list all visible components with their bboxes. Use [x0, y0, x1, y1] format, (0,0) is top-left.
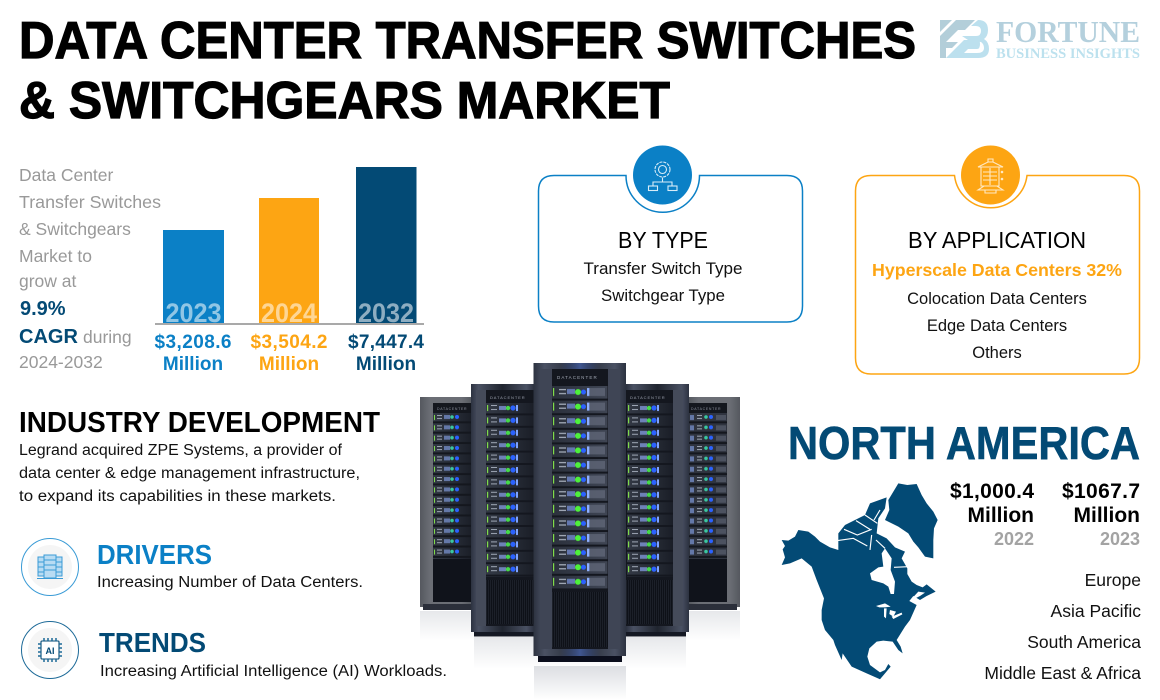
values: north america: Million [968, 504, 1034, 527]
drivers heading: DRIVERS [97, 539, 212, 570]
growth text block [19, 165, 161, 372]
list: Others [972, 344, 1022, 362]
list: other regions: Middle East & Africa [984, 663, 1141, 683]
text block: industry development: Legrand acquired ZPE Systems, a provider of [19, 442, 343, 459]
bar 2024 [259, 198, 319, 328]
logo: Fortune Business Insights: BUSINESS INSIGHTS [996, 46, 1140, 62]
values: north america [950, 480, 1140, 549]
heading: industry development: INDUSTRY DEVELOPMENT [19, 407, 380, 439]
growth text block: 9.9% [20, 298, 66, 320]
drivers text: Increasing Number of Data Centers. [97, 574, 363, 591]
list: Colocation Data Centers [907, 290, 1087, 308]
panel heading: BY APPLICATION [908, 227, 1086, 253]
growth text block: Market to [19, 246, 92, 266]
title: DATA CENTER TRANSFER SWITCHES [19, 12, 916, 70]
logo: Fortune Business Insights [940, 14, 1140, 62]
bar 2023 [163, 230, 224, 328]
bar 2023: 2023 [166, 298, 222, 328]
rack: centre [534, 363, 626, 662]
icon: transfer switch [961, 146, 1020, 204]
values: north america: $1,000.4 [950, 480, 1034, 503]
rack: outer left [420, 397, 472, 610]
map: north america [782, 483, 938, 679]
text block: industry development: data center & edge management infrastructure, [19, 465, 360, 482]
rack: outer left: DATACENTER [437, 407, 467, 411]
icon: trends AI chip: AI [46, 646, 54, 656]
value labels: $3,208.6 [154, 332, 232, 353]
trends heading: TRENDS [99, 627, 206, 658]
growth text block: CAGR [19, 326, 78, 348]
growth text block: grow at [19, 271, 77, 291]
rack: outer right [688, 397, 740, 610]
panel heading: BY TYPE [618, 227, 708, 253]
greenland [885, 483, 938, 558]
growth text block: Transfer Switches [19, 192, 161, 212]
growth text block: Data Center [19, 165, 114, 185]
text block: industry development: to expand its capabilities in these markets. [19, 488, 336, 505]
list: Edge Data Centers [927, 317, 1067, 335]
rack: middle left: DATACENTER [490, 395, 526, 400]
values: north america: 2022 [994, 529, 1034, 549]
title: & SWITCHGEARS MARKET [19, 72, 670, 130]
mainland and arctic islands [782, 497, 936, 679]
values: north america: Million [1074, 504, 1140, 527]
list: other regions: Europe [1085, 570, 1141, 590]
rack: middle right: DATACENTER [630, 395, 666, 400]
growth text block: during [83, 327, 132, 347]
title [19, 12, 916, 130]
list: Transfer Switch Type [584, 260, 742, 278]
bar chart: market size [154, 167, 424, 375]
panel: by type [538, 146, 802, 322]
rack: outer right: DATACENTER [691, 407, 721, 411]
list: Switchgear Type [601, 287, 725, 305]
logo: Fortune Business Insights: FORTUNE [996, 14, 1140, 49]
list [907, 290, 1087, 362]
values: north america: $1067.7 [1062, 480, 1140, 503]
icon: gear hierarchy [633, 146, 692, 204]
icon: drivers [22, 538, 78, 596]
bar 2024: 2024 [261, 298, 317, 328]
value labels: Million [163, 354, 223, 375]
value labels: $7,447.4 [348, 332, 424, 353]
value labels [154, 332, 424, 375]
arctic channels [837, 510, 908, 567]
list: other regions: South America [1027, 632, 1141, 652]
rack: centre: DATACENTER [557, 375, 598, 380]
rack: middle left [471, 384, 534, 636]
list: other regions [984, 570, 1141, 683]
icon: trends AI chip [22, 622, 78, 678]
value labels: $3,504.2 [250, 332, 328, 353]
values: north america: 2023 [1100, 529, 1140, 549]
value labels: Million [356, 354, 416, 375]
great lakes [876, 592, 925, 619]
value labels: Million [259, 354, 319, 375]
bar 2032 [356, 167, 416, 328]
illustration: server racks [420, 363, 740, 700]
bar 2032: 2032 [358, 298, 414, 328]
rack: middle right [626, 384, 689, 636]
list [584, 260, 742, 305]
reflections [420, 611, 740, 700]
growth text block: 2024-2032 [19, 352, 103, 372]
trends text: Increasing Artificial Intelligence (AI) Workloads. [100, 663, 447, 680]
panel: by application [856, 146, 1140, 374]
text block: industry development [19, 442, 360, 505]
list: other regions: Asia Pacific [1051, 601, 1141, 621]
highlight: Hyperscale Data Centers 32% [872, 260, 1122, 280]
growth text block: & Switchgears [19, 219, 131, 239]
